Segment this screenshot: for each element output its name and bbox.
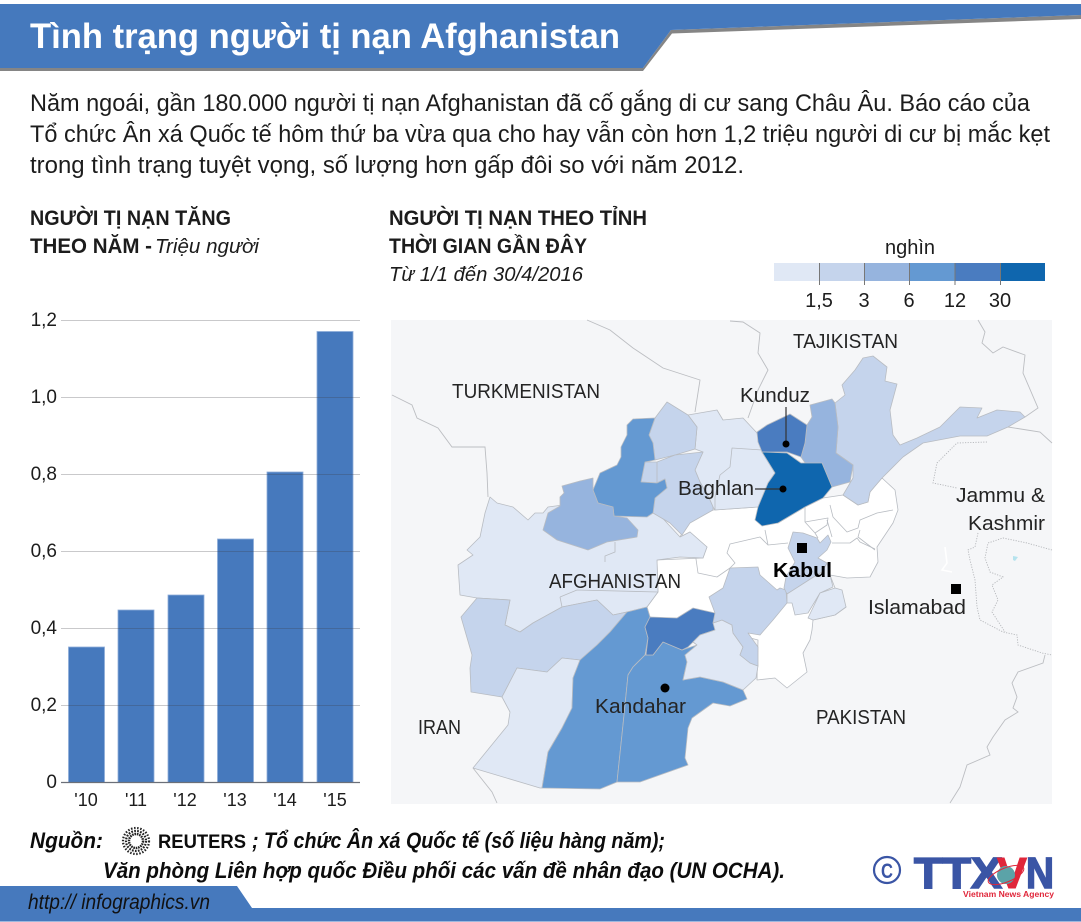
bar chart: refugees per year: 0,4 bbox=[31, 618, 57, 639]
provinces with no data (white) bbox=[647, 478, 898, 688]
bar chart: refugees per year: '13 bbox=[223, 790, 247, 810]
logo: TTXVN: TTX bbox=[914, 849, 1002, 898]
map labels: Kandahar bbox=[595, 695, 686, 718]
logo: TTXVN: V bbox=[997, 849, 1028, 898]
province: Nimruz bbox=[473, 658, 580, 788]
bar chart: refugees per year: 0,2 bbox=[31, 695, 57, 716]
bar chart: refugees per year: '15 bbox=[323, 790, 347, 810]
legend: thousands scale: nghìn bbox=[885, 237, 935, 259]
province: Jawzjan bbox=[649, 402, 697, 460]
map labels: TAJIKISTAN bbox=[793, 330, 898, 353]
province: Zabul bbox=[683, 620, 758, 690]
logo: TTXVN: N bbox=[1026, 849, 1054, 898]
source credits: ; Tổ chức Ân xá Quốc tế (số liệu hàng năm); bbox=[252, 828, 665, 853]
province: Helmand bbox=[542, 607, 650, 789]
bar chart: refugees per year: 1,2 bbox=[31, 310, 57, 331]
heading: refugees by province bbox=[389, 206, 647, 286]
legend: thousands scale: 6 bbox=[903, 290, 915, 312]
bar chart: refugees per year: '12 bbox=[173, 790, 197, 810]
map labels: Baghlan bbox=[678, 477, 754, 500]
map labels: IRAN bbox=[418, 716, 461, 739]
legend: thousands scale: 1,5 bbox=[805, 290, 833, 312]
legend: thousands scale: 12 bbox=[944, 290, 966, 312]
title banner: Tình trạng người tị nạn Afghanistan bbox=[30, 17, 620, 56]
province: lightest class west and centre bbox=[458, 356, 1025, 789]
heading: refugees by province: THỜI GIAN GẦN ĐÂY bbox=[389, 234, 587, 258]
bar chart: refugees per year: '14 bbox=[273, 790, 297, 810]
province: Farah bbox=[461, 598, 627, 697]
legend: thousands scale bbox=[774, 237, 1045, 312]
map labels: Kunduz bbox=[740, 384, 810, 407]
province: Takhar bbox=[801, 399, 853, 487]
map labels: Kashmir bbox=[968, 512, 1045, 535]
map labels bbox=[418, 330, 1045, 739]
map labels: PAKISTAN bbox=[816, 706, 906, 729]
province: Badghis bbox=[543, 478, 638, 550]
province: Kabul bbox=[784, 532, 831, 594]
intro text: Tổ chức Ân xá Quốc tế hôm thứ ba vừa qua cho hay vẫn còn hơn 1,2 triệu người di cư bị mắc kẹt bbox=[30, 121, 1050, 148]
copyright symbol bbox=[874, 857, 900, 883]
title banner bbox=[0, 4, 1081, 71]
bar chart: refugees per year bbox=[31, 310, 360, 810]
intro text: trong tình trạng tuyệt vọng, số lượng hơn gấp đôi so với năm 2012. bbox=[30, 152, 744, 179]
source credits: REUTERS bbox=[158, 832, 246, 853]
map labels: AFGHANISTAN bbox=[549, 570, 681, 593]
source credits: Văn phòng Liên hợp quốc Điều phối các vấn đề nhân đạo (UN OCHA). bbox=[103, 858, 785, 883]
logo: TTXVN: Vietnam News Agency bbox=[963, 889, 1054, 899]
legend: thousands scale: 30 bbox=[989, 290, 1011, 312]
bar chart: refugees per year: 0,8 bbox=[31, 464, 57, 485]
heading: refugees by year: THEO NĂM - bbox=[30, 235, 152, 258]
bar chart: refugees per year: 0 bbox=[46, 772, 57, 793]
map labels: Jammu & bbox=[956, 484, 1045, 507]
heading: refugees by year: Triệu người bbox=[155, 236, 260, 258]
heading: refugees by province: NGƯỜI TỊ NẠN THEO TỈNH bbox=[389, 206, 647, 230]
map: refugees by province bbox=[391, 320, 1052, 804]
heading: refugees by year: NGƯỜI TỊ NẠN TĂNG bbox=[30, 206, 231, 230]
map labels: TURKMENISTAN bbox=[452, 380, 600, 403]
province: Balkh and Samangan bbox=[688, 410, 775, 510]
province: Faryab bbox=[593, 418, 667, 517]
intro text bbox=[30, 90, 1050, 179]
province: Ghazni bbox=[709, 567, 787, 666]
icon: Reuters logo bbox=[123, 828, 149, 854]
copyright symbol: C bbox=[881, 860, 893, 883]
map labels: Islamabad bbox=[868, 596, 966, 619]
heading: refugees by province: Từ 1/1 đến 30/4/2016 bbox=[389, 264, 584, 286]
bar chart: refugees per year: 1,0 bbox=[31, 387, 57, 408]
intro text: Năm ngoái, gần 180.000 người tị nạn Afghanistan đã cố gắng di cư sang Châu Âu. Báo cáo của bbox=[30, 90, 1031, 117]
bar chart: refugees per year: 0,6 bbox=[31, 541, 57, 562]
province: Badakhshan bbox=[835, 356, 1025, 505]
city markers bbox=[660, 407, 961, 692]
bar chart: refugees per year: '11 bbox=[125, 790, 147, 810]
heading: refugees by year bbox=[30, 206, 260, 258]
province: Uruzgan bbox=[645, 608, 715, 655]
source credits: Nguồn: bbox=[30, 828, 103, 853]
province: Baghlan bbox=[755, 452, 832, 526]
province: Khost bbox=[808, 588, 846, 620]
map labels: Kabul bbox=[773, 559, 832, 582]
bar chart: refugees per year: '10 bbox=[74, 790, 98, 810]
logo: TTXVN bbox=[914, 849, 1054, 899]
province: Kunduz bbox=[757, 414, 807, 457]
province: Kandahar bbox=[617, 642, 747, 782]
footer band bbox=[0, 886, 1081, 922]
source credits bbox=[30, 828, 785, 883]
legend: thousands scale: 3 bbox=[858, 290, 870, 312]
province: Logar bbox=[787, 563, 833, 615]
footer band: http:// infographics.vn bbox=[28, 891, 210, 914]
province: Sar-e Pol bbox=[641, 452, 713, 535]
